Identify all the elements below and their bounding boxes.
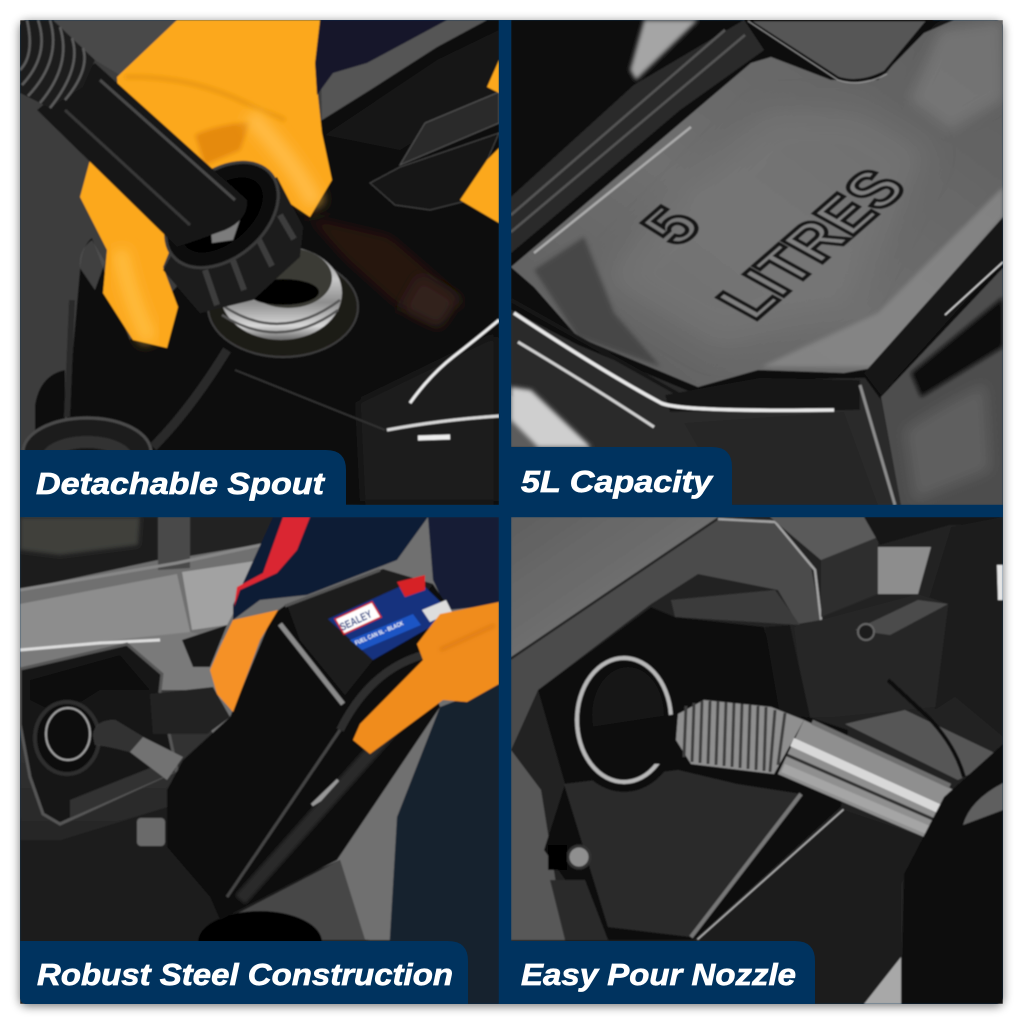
- glare top: [630, 20, 698, 80]
- panel: robust steel construction photo: [20, 517, 499, 1004]
- right black band: [864, 217, 1003, 395]
- silver pipe: [778, 720, 954, 837]
- lighter strip: [761, 187, 1003, 367]
- nozzle: [93, 720, 183, 780]
- label: 5L Capacity: [511, 447, 732, 505]
- grey gap and cable: [845, 710, 1003, 780]
- label: Easy Pour Nozzle: [511, 941, 815, 1004]
- label: Easy Pour Nozzle: Easy Pour Nozzle: [521, 957, 796, 992]
- label: Robust Steel Construction: Robust Steel Construction: [37, 957, 453, 992]
- corrugated spout end: [20, 20, 95, 108]
- bolts and clips: [548, 845, 608, 940]
- label: Detachable Spout: [20, 450, 346, 505]
- navy grid dividers: [499, 20, 511, 1004]
- upper body: [511, 517, 718, 657]
- spout bracket: [400, 92, 499, 165]
- small hardware: [137, 818, 165, 846]
- embossed LITRES: LITRES: [702, 159, 921, 329]
- embossed panel: [511, 20, 1003, 387]
- fuel flap recess: [20, 644, 177, 824]
- darker patch: [534, 237, 661, 367]
- filler ring: [35, 702, 99, 774]
- diagonal band: [511, 20, 764, 253]
- black tube: [591, 714, 676, 764]
- foreground can: [901, 744, 1003, 1004]
- hinge and flap: [150, 687, 230, 734]
- door panels: [20, 574, 192, 650]
- silver bottom detail: [864, 957, 901, 1004]
- product label: FUEL CAN 5L - BLACK: [354, 621, 405, 647]
- panel: 5L capacity photo: [511, 20, 1003, 505]
- embossed 5: 5: [626, 196, 717, 255]
- product label: [328, 575, 453, 660]
- worker body: [428, 517, 499, 610]
- product label: SEALEY: [338, 608, 375, 634]
- sleeve: [233, 517, 428, 620]
- panel: detachable spout photo: [20, 20, 499, 505]
- left panel: [511, 750, 565, 940]
- cap on strap: [22, 415, 154, 450]
- lower body: [511, 310, 901, 505]
- top right surroundings: [821, 537, 878, 617]
- lower car: [20, 690, 370, 940]
- corrugated nozzle: [676, 700, 804, 774]
- label: Robust Steel Construction: [20, 941, 468, 1004]
- hinge arm: [765, 594, 948, 717]
- lower right body: [511, 810, 924, 1004]
- label: 5L Capacity: 5L Capacity: [521, 464, 714, 499]
- left glove: [210, 610, 278, 712]
- frame band: [511, 520, 821, 750]
- knurled collar: [162, 160, 304, 314]
- can left gloss: [80, 240, 105, 290]
- top recess: [748, 20, 930, 80]
- wheel arch: [198, 910, 322, 941]
- filler flange and threaded neck: [208, 246, 358, 357]
- right glove: [353, 602, 499, 754]
- label: Detachable Spout: Detachable Spout: [36, 466, 326, 501]
- sleeve: [315, 20, 447, 95]
- top handle shading: [325, 30, 499, 150]
- hand and glove: [80, 20, 332, 348]
- can body: [67, 20, 499, 505]
- brown gloss reflections: [305, 215, 465, 320]
- can: [167, 569, 453, 920]
- spout tube: [37, 63, 247, 247]
- filler ring: [566, 648, 682, 792]
- panel: easy pour nozzle photo: [511, 517, 1003, 1004]
- car windows: [20, 517, 158, 590]
- mirror housing: [915, 517, 1003, 737]
- recess: [538, 607, 848, 940]
